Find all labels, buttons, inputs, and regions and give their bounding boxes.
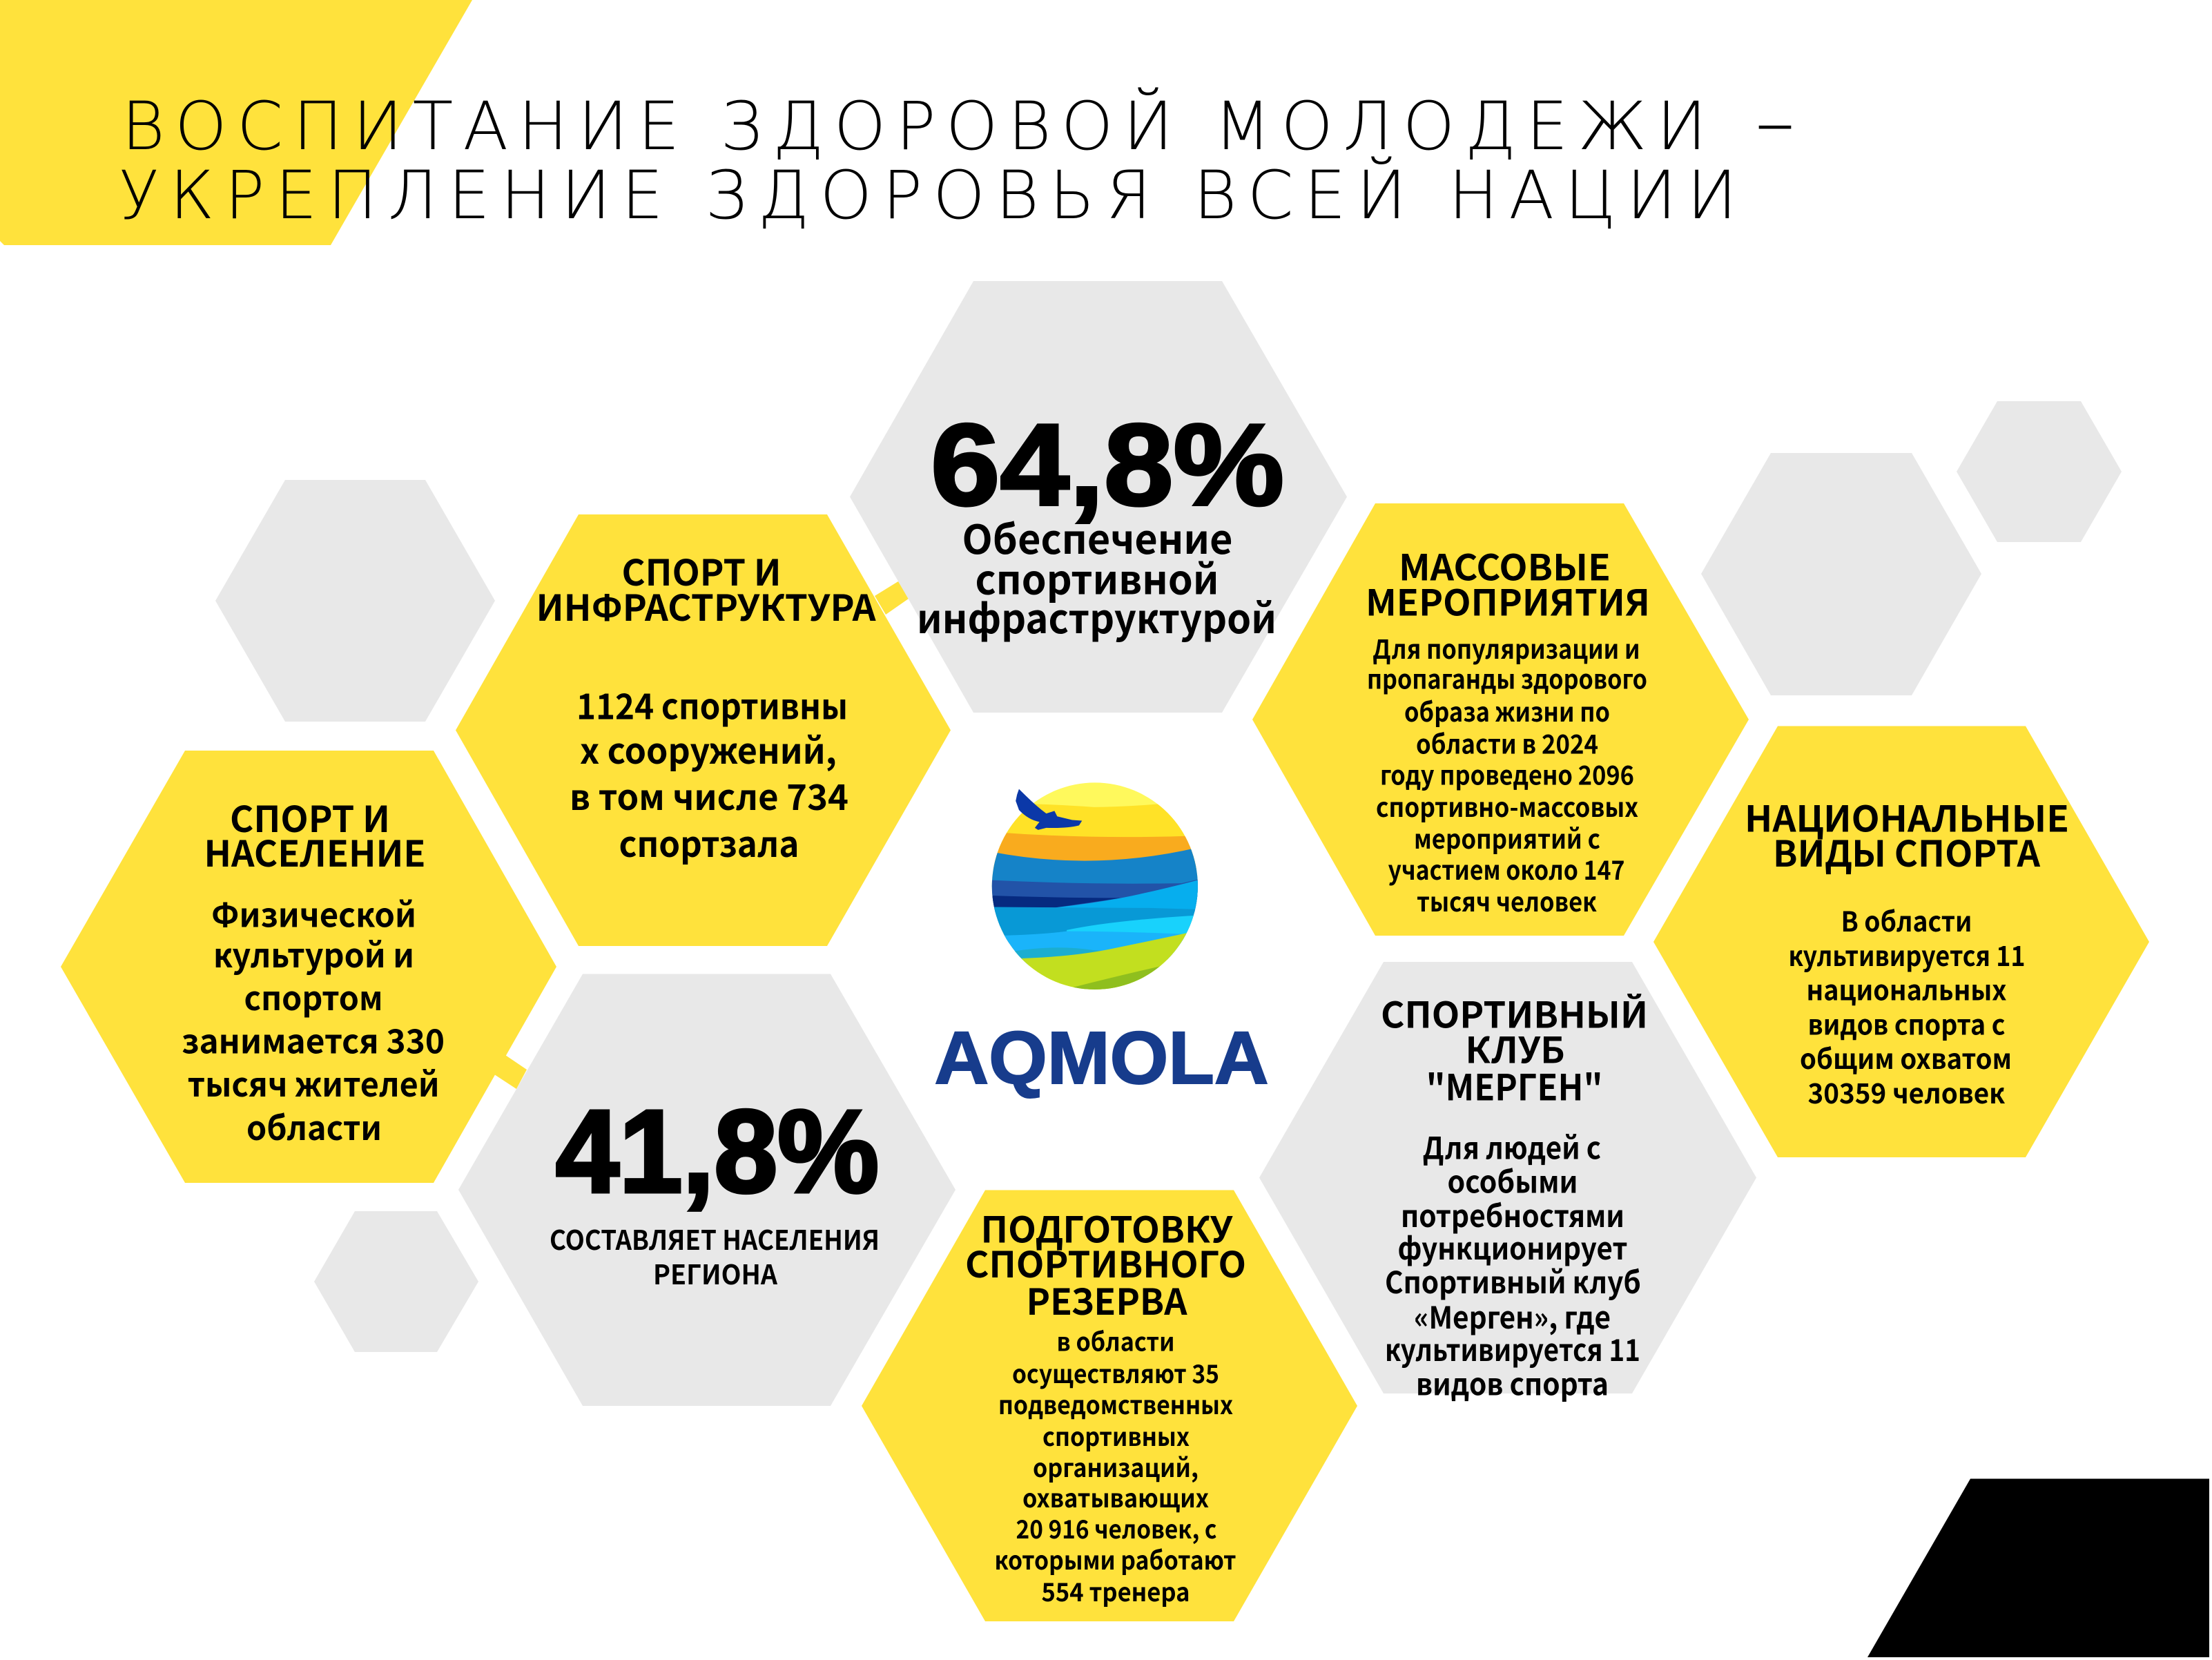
body text: занимается 330 [182,1015,445,1063]
heading [536,544,876,631]
panel: mass events [1252,503,1749,936]
body text: участием около 147 [1388,849,1625,887]
connector: population to 41,8% [494,1055,527,1089]
body text: х сооружений, [580,723,837,774]
body text: В области [1841,900,1972,940]
caption: share of the population: СОСТАВЛЯЕТ НАСЕЛЕНИЯ [550,1219,880,1258]
body text: охватывающих [1022,1478,1209,1515]
heading: СПОРТИВНЫЙ [1381,986,1648,1039]
body text: спортом [244,972,382,1020]
body text: спортзала [619,816,799,867]
heading [1381,986,1648,1110]
body text: тысяч жителей [188,1058,439,1106]
body text: спортивно-массовых [1376,786,1638,824]
body text [182,888,445,1150]
decorative corner: yellow top-left [0,0,472,245]
body text: организаций, [1033,1447,1199,1485]
body text: Физической [211,888,416,936]
heading: СПОРТ И [230,791,390,842]
body text: области [246,1101,382,1150]
title: – [1755,75,1795,168]
title: ВОСПИТАНИЕ ЗДОРОВОЙ МОЛОДЕЖИ [122,87,1707,165]
body text: «Мерген», где [1414,1293,1611,1338]
body text: в области [1056,1322,1175,1359]
heading: МАССОВЫЕ [1399,539,1611,591]
heading: ВИДЫ СПОРТА [1773,825,2041,877]
panel: 41,8% [458,974,955,1406]
body text: тысяч человек [1417,881,1597,919]
body text: Для популяризации и [1372,628,1640,666]
body text: культивируется 11 [1788,934,2026,974]
body text [1788,900,2026,1112]
decorative gray hexagon left large [215,480,495,722]
body text: 554 тренера [1041,1572,1190,1609]
logo: Aqmola region [935,777,1269,1099]
logo wordmark: AQMOLA [935,1016,1269,1099]
panel: 64,8% [850,281,1347,713]
body text: в том числе 734 [570,769,848,820]
body text: мероприятий с [1414,818,1600,856]
heading [204,791,425,877]
caption: share of the population [550,1219,880,1293]
heading [1366,539,1650,626]
body text: функционирует [1397,1224,1628,1268]
decorative gray hexagon right large [1701,453,1981,695]
caption: share of the population: РЕГИОНА [653,1254,778,1293]
body text [1367,628,1647,919]
heading: НАСЕЛЕНИЕ [204,825,425,877]
big number 41,8%: 41,8% [556,1086,879,1217]
body text: культурой и [213,929,414,977]
body text: пропаганды здорового [1367,659,1647,696]
heading: "МЕРГЕН" [1426,1059,1603,1110]
decorative corner: black bottom-right [1867,1479,2209,1657]
body text: осуществляют 35 [1012,1353,1219,1391]
body text [1385,1124,1641,1405]
panel: training the sports reserve [862,1190,1357,1621]
body text [994,1322,1236,1609]
panel: sport and infrastructure [456,514,951,946]
heading: НАЦИОНАЛЬНЫЕ [1745,790,2069,842]
body text: подведомственных [998,1384,1233,1422]
logo globe with bands and eagle [991,782,1198,990]
heading: МЕРОПРИЯТИЯ [1366,575,1650,626]
title [119,75,1795,234]
caption: infrastructure provision: Обеспечение [962,508,1233,566]
body text: Спортивный клуб [1385,1258,1641,1302]
panel: Mergen sports club [1259,962,1756,1405]
body text: 1124 спортивны [576,678,848,729]
big number 64,8%: 64,8% [931,400,1284,530]
body text [570,678,848,867]
body text: Для людей с [1423,1124,1601,1168]
body text: образа жизни по [1404,691,1610,729]
body text: национальных [1806,968,2006,1008]
decorative gray hexagon right small [1957,401,2122,542]
body text: области в 2024 [1416,724,1598,761]
panel: sport and population [61,751,556,1183]
heading: СПОРТИВНОГО [965,1236,1246,1288]
panel: national sports [1653,726,2149,1157]
heading [1745,790,2069,877]
body text: видов спорта с [1807,1003,2005,1043]
heading: РЕЗЕРВА [1026,1273,1187,1325]
heading: ИНФРАСТРУКТУРА [536,579,876,631]
heading [965,1201,1246,1325]
body text: потребностями [1401,1192,1624,1236]
caption: infrastructure provision [917,508,1277,645]
heading: СПОРТ И [621,544,782,596]
heading: ПОДГОТОВКУ [980,1201,1233,1253]
body text: спортивных [1042,1416,1190,1454]
title: УКРЕПЛЕНИЕ ЗДОРОВЬЯ ВСЕЙ НАЦИИ [119,156,1737,234]
body text: 30359 человек [1807,1072,2005,1112]
caption: infrastructure provision: спортивной [975,548,1219,606]
body text: особыми [1447,1157,1578,1201]
body text: видов спорта [1416,1360,1609,1405]
body text: 20 916 человек, с [1016,1509,1216,1546]
body text: году проведено 2096 [1380,754,1634,793]
body text: которыми работают [994,1540,1236,1577]
caption: infrastructure provision: инфраструктурой [917,587,1277,645]
body text: общим охватом [1800,1037,2012,1077]
heading: КЛУБ [1465,1022,1564,1073]
decorative gray hexagon left small [314,1211,478,1352]
connector: infrastructure to 64,8% [875,581,909,615]
body text: культивируется 11 [1385,1326,1640,1370]
